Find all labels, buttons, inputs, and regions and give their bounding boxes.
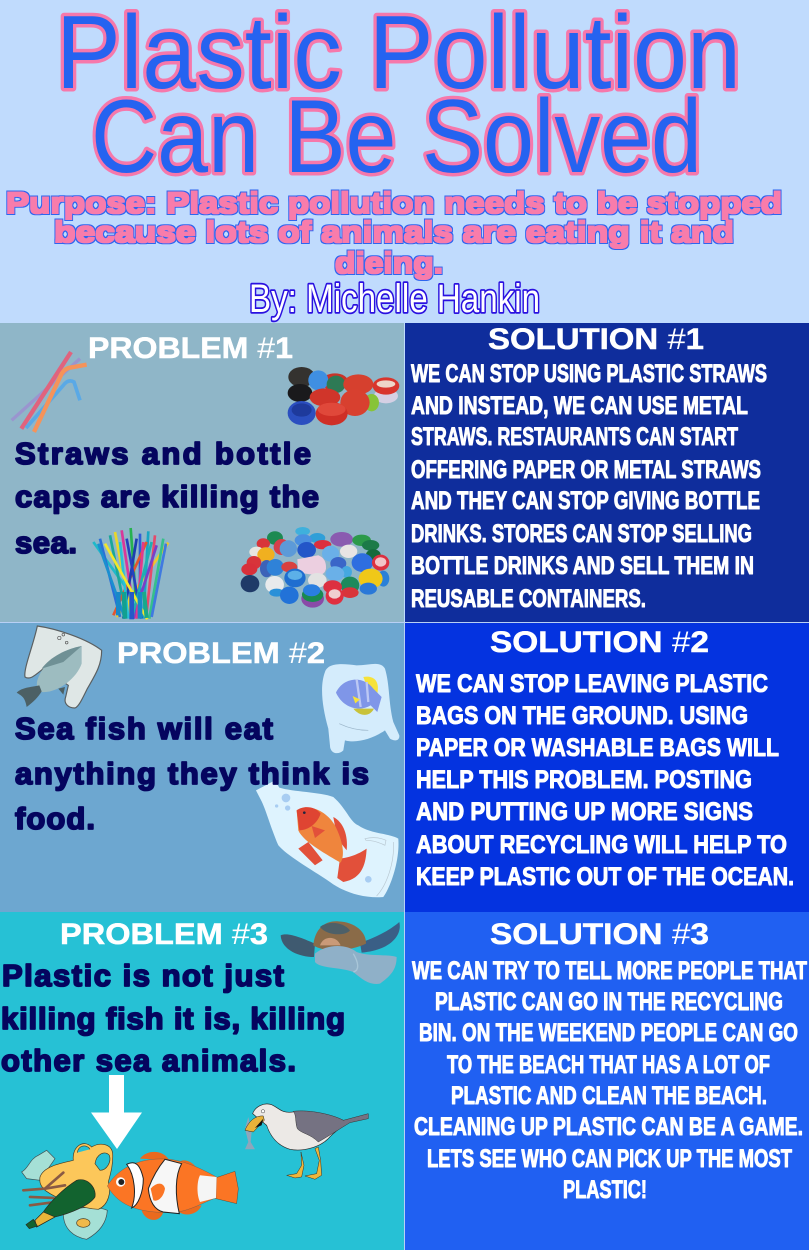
panel: solution 1 [405,323,809,622]
author byline: By: Michelle Hankin [249,277,540,321]
icon: turtle with plastic bag [281,921,400,984]
text: problem 1 statement [15,436,319,560]
panel: solution 2 [405,623,809,912]
icon: fish in plastic bag [17,626,102,708]
purpose statement: because lots of animals are eating it and [54,216,734,249]
heading: problem 3: PROBLEM #3 [60,918,268,951]
panel: problem 3 [0,912,404,1250]
text: solution 1 body [411,360,767,613]
text: solution 3 body: PLASTIC! [563,1176,647,1204]
text: problem 1 statement: sea. [15,525,77,560]
icon: coloured straws [12,352,87,432]
purpose statement: Purpose: Plastic pollution needs to be stopped [6,187,782,220]
text: solution 2 body [416,670,794,891]
text: solution 2 body: BAGS ON THE GROUND. USING [416,702,748,730]
icon: plastic trash pile [22,1144,113,1239]
heading: problem 1: PROBLEM #1 [88,332,293,365]
purpose statement [6,187,782,280]
icon: bottle caps large pile [241,527,389,608]
panel: problem 2 [0,623,404,912]
text: problem 3 statement: killing fish it is, killing [1,1001,345,1036]
icon: blue fish in plastic bag [322,664,399,753]
text: problem 1 statement: caps are killing the [15,479,319,514]
text: problem 3 statement [1,958,345,1078]
icon: bottle caps small pile [288,367,399,425]
text: solution 2 body: AND PUTTING UP MORE SIGNS [416,798,753,826]
text: problem 2 statement [15,711,369,836]
text: problem 2 statement: anything they think is [15,756,369,791]
heading: solution 1: SOLUTION #1 [488,323,704,356]
text: problem 3 statement: other sea animals. [1,1043,296,1078]
text: problem 1 statement: Straws and bottle [15,436,311,471]
icon: orange fish in plastic bottle [256,780,399,897]
arrow: pointing down to fish [91,1075,142,1149]
panel: solution 3 [405,912,809,1250]
heading: solution 2: SOLUTION #2 [490,626,709,659]
icon: seagull eating plastic fish [245,1104,368,1179]
header background [0,0,809,323]
text: problem 2 statement: Sea fish will eat [15,711,273,746]
text: solution 1 body: REUSABLE CONTAINERS. [411,585,646,613]
text: solution 3 body [412,957,807,1204]
title: Can Be Solved [91,79,702,195]
section divider lines [0,622,809,1250]
text: problem 3 statement: Plastic is not just [2,958,284,993]
icon: clownfish [107,1152,238,1220]
icon: bundle of straws [93,528,168,619]
title [56,0,741,195]
text: problem 2 statement: food. [15,801,95,836]
purpose statement: dieing. [335,247,443,280]
text: solution 2 body: HELP THIS PROBLEM. POSTING [416,766,752,794]
panel: problem 1 [0,323,404,622]
heading: solution 3: SOLUTION #3 [490,918,709,951]
heading: problem 2: PROBLEM #2 [117,637,325,670]
